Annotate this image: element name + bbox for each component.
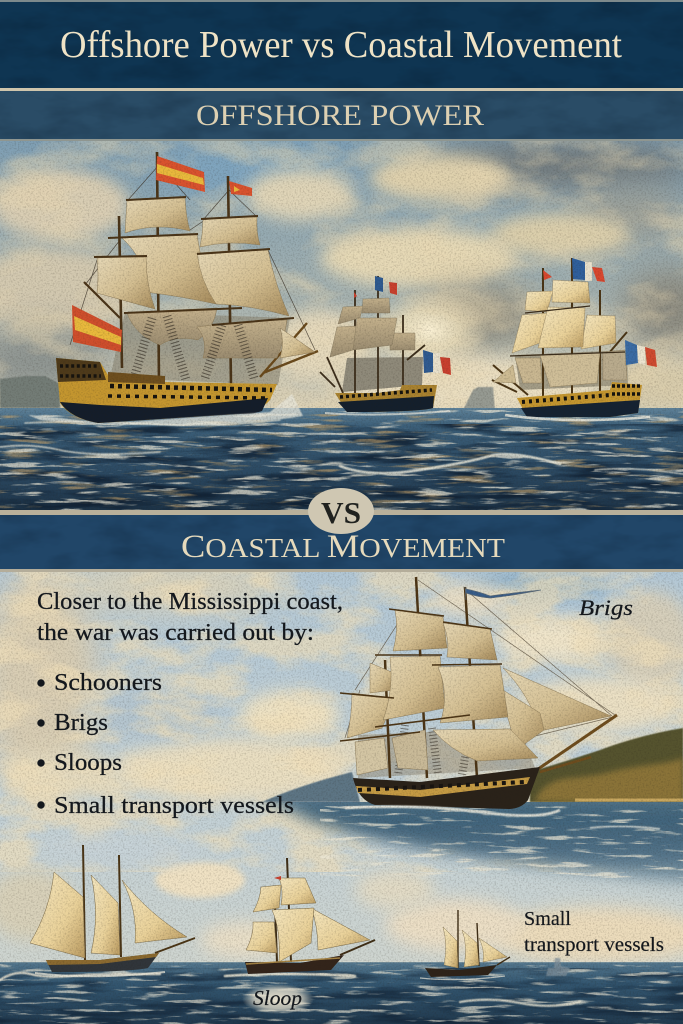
section header: offshore power: OFFSHORE POWER bbox=[196, 99, 484, 132]
bow wash bbox=[28, 394, 303, 425]
hull bbox=[353, 767, 540, 809]
label: Sloop bbox=[242, 984, 314, 1014]
distant coast and forest bbox=[262, 728, 683, 802]
text block: intro bbox=[37, 589, 343, 646]
label: small transport vessels: Small bbox=[524, 908, 571, 930]
label: Brigs: Brigs bbox=[579, 595, 633, 620]
distant steamer bbox=[546, 958, 570, 976]
panel: offshore power painting bbox=[0, 139, 683, 512]
sails bbox=[347, 610, 611, 775]
list: vessel types: Sloops bbox=[54, 750, 122, 776]
section header: coastal movement bbox=[0, 515, 683, 569]
list: vessel types: Brigs bbox=[54, 710, 108, 736]
list: vessel types: Small transport vessels bbox=[54, 793, 294, 819]
pennant bbox=[465, 587, 541, 600]
rigging and masts bbox=[70, 152, 318, 385]
lower sky with clouds bbox=[0, 836, 683, 963]
title: Offshore Power vs Coastal Movement bbox=[60, 24, 622, 66]
section header: offshore power bbox=[0, 91, 683, 139]
ship: centre French ship bbox=[320, 276, 451, 415]
ship: Spanish flagship bbox=[28, 152, 318, 425]
foreground sea bbox=[0, 962, 683, 1024]
VS badge bbox=[308, 488, 374, 534]
list: vessel types: Schooners bbox=[54, 670, 162, 696]
list: vessel types bbox=[37, 670, 294, 819]
ship: right French ship bbox=[492, 258, 657, 420]
text block: intro: the war was carried out by: bbox=[37, 620, 314, 646]
painting grain bbox=[0, 141, 683, 510]
sails bbox=[97, 197, 315, 358]
ship: small transport vessel bbox=[420, 910, 510, 980]
painting grain bbox=[0, 572, 683, 1024]
sky with clouds bbox=[0, 139, 683, 413]
shrouds bbox=[398, 725, 470, 775]
text block: intro: Closer to the Mississippi coast, bbox=[37, 589, 343, 615]
title banner bbox=[0, 0, 683, 88]
shrouds bbox=[135, 316, 254, 380]
wake bbox=[345, 807, 560, 816]
label: small transport vessels bbox=[524, 908, 664, 956]
coastal sea bbox=[250, 790, 683, 884]
yards bbox=[94, 197, 294, 325]
label: Sloop: Sloop bbox=[253, 986, 302, 1010]
section header: coastal movement: COASTAL MOVEMENT bbox=[181, 529, 506, 565]
sea with waves bbox=[0, 408, 683, 512]
ship: schooner bbox=[30, 845, 195, 976]
ship: brig under full sail bbox=[340, 577, 617, 816]
yards bbox=[340, 609, 502, 741]
hull bbox=[56, 358, 277, 423]
flags bbox=[72, 156, 252, 352]
VS badge: VS bbox=[321, 495, 361, 530]
label: small transport vessels: transport vessels bbox=[524, 934, 664, 956]
sky with clouds bbox=[0, 572, 683, 962]
rigging bbox=[345, 580, 617, 750]
masts bbox=[385, 577, 617, 778]
panel: coastal movement painting bbox=[0, 560, 683, 1024]
ship: sloop bbox=[245, 858, 375, 974]
